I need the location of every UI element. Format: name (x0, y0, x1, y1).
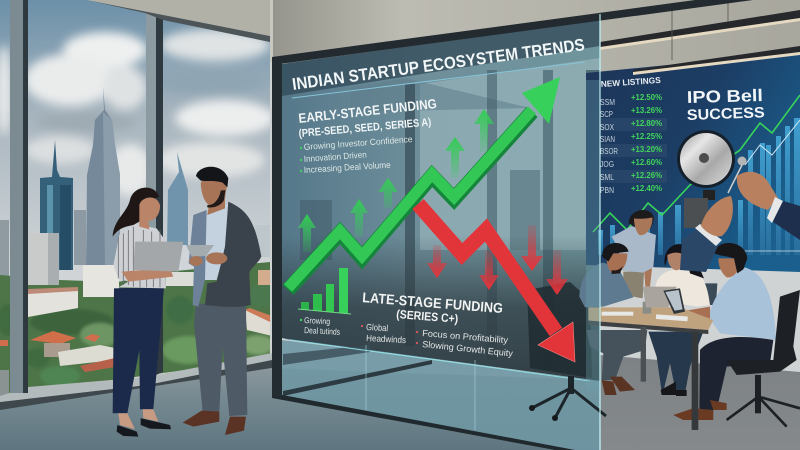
small green up arrows (298, 109, 494, 252)
growing deal text: Deal tutinds (304, 325, 340, 337)
standing woman (612, 210, 656, 298)
early-stage subheading: (PRE-SEED, SEED, SERIES A) (298, 116, 432, 140)
listings header: NEW LISTINGS (600, 75, 661, 89)
glass lower floor reflection (282, 340, 600, 450)
floor left (0, 368, 600, 450)
listings rows: SOX (600, 123, 615, 132)
window frame (0, 0, 273, 410)
woman shoes (117, 418, 171, 437)
chair behind centre woman (705, 283, 717, 305)
woman arm (122, 268, 173, 282)
listings rows (600, 98, 618, 195)
late-stage bullets: Slowing Growth Equity (422, 339, 514, 359)
floor right (600, 355, 800, 450)
clouds (0, 29, 275, 196)
late-stage funding text (361, 289, 514, 359)
city buildings and rooftops (28, 290, 78, 317)
listings rows: BSOR (600, 147, 618, 156)
growing deal text (300, 315, 340, 337)
hands ringing bell (680, 172, 800, 272)
listings table: +12.80% (631, 118, 662, 128)
listings rows: SSM (600, 98, 615, 107)
right fist (737, 172, 778, 210)
early-stage bullets (300, 134, 413, 175)
listings table (600, 75, 667, 195)
tablet and hands (186, 245, 214, 257)
woman hair and head (113, 188, 159, 237)
skyscrapers (0, 86, 270, 280)
listings table: +13.26% (631, 105, 662, 115)
listings table: +12.60% (631, 157, 662, 167)
laptop (133, 242, 183, 272)
man trousers (194, 303, 247, 416)
office chair (727, 290, 800, 413)
listings rows: PBN (600, 186, 614, 195)
late-stage bullets (361, 322, 514, 359)
man jacket (189, 210, 207, 307)
seated man right (673, 243, 776, 420)
IPO display screen (586, 46, 800, 272)
listings table: +12.25% (631, 131, 662, 141)
man head (201, 176, 227, 215)
laptops on table (643, 287, 685, 314)
listings table: +12.26% (631, 170, 662, 180)
green bar chart (298, 268, 351, 314)
listings table: +12.40% (631, 183, 662, 193)
trees (0, 233, 276, 396)
left fist (701, 196, 733, 236)
main falling red arrow (418, 204, 575, 362)
listings rows: SCP (600, 110, 613, 119)
early-stage funding text (298, 96, 438, 175)
success heading: SUCCESS (687, 104, 765, 124)
glass top and side frame (272, 0, 753, 65)
left sleeve (680, 229, 718, 272)
seated man left (579, 243, 647, 395)
conference chair seen through glass (527, 282, 606, 421)
listings rows: JOG (600, 160, 614, 169)
IPO heading: IPO Bell (687, 86, 763, 107)
main rising green arrow (288, 77, 560, 290)
man in suit with tablet (183, 167, 261, 435)
screen bar chart (598, 118, 800, 255)
window with city skyline (0, 0, 276, 400)
glass tint over team (586, 80, 600, 390)
reflected room in glass (282, 20, 600, 381)
early-stage heading: EARLY-STAGE FUNDING (298, 96, 438, 126)
early-stage bullets: Innovation Driven (303, 149, 367, 164)
silver bell (677, 130, 746, 228)
woman trousers (113, 287, 164, 413)
early-stage bullets: Increasing Deal Volume (304, 160, 391, 175)
early-stage bullets: Growing Investor Confidence (303, 134, 413, 152)
listings table: +13.20% (631, 144, 662, 154)
seated team around table (579, 210, 800, 430)
late-stage bullets: Headwinds (366, 333, 407, 345)
listings rows: SML (600, 173, 614, 182)
woman with laptop (113, 188, 183, 437)
ceiling light beam upper (600, 10, 800, 49)
meeting table (588, 302, 713, 430)
seated woman centre (648, 244, 710, 396)
small red down arrows (427, 225, 568, 295)
woman blouse (113, 224, 166, 288)
man shirt (203, 203, 228, 280)
listings table: +12.50% (631, 92, 662, 102)
late-stage bullets: Focus on Profitability (422, 328, 509, 345)
listings rows: SIAN (600, 135, 615, 144)
late-stage heading: LATE-STAGE FUNDING (362, 289, 504, 316)
late-stage bullets: Global (366, 322, 388, 333)
transparent glass panel (272, 0, 753, 450)
growing deal text: Growing (304, 315, 331, 326)
screen line chart (593, 95, 800, 232)
title: INDIAN STARTUP ECOSYSTEM TRENDS (291, 35, 586, 94)
right sleeve (773, 200, 800, 240)
man shoes (183, 411, 246, 435)
late-stage subheading: (SERIES C+) (396, 307, 459, 326)
